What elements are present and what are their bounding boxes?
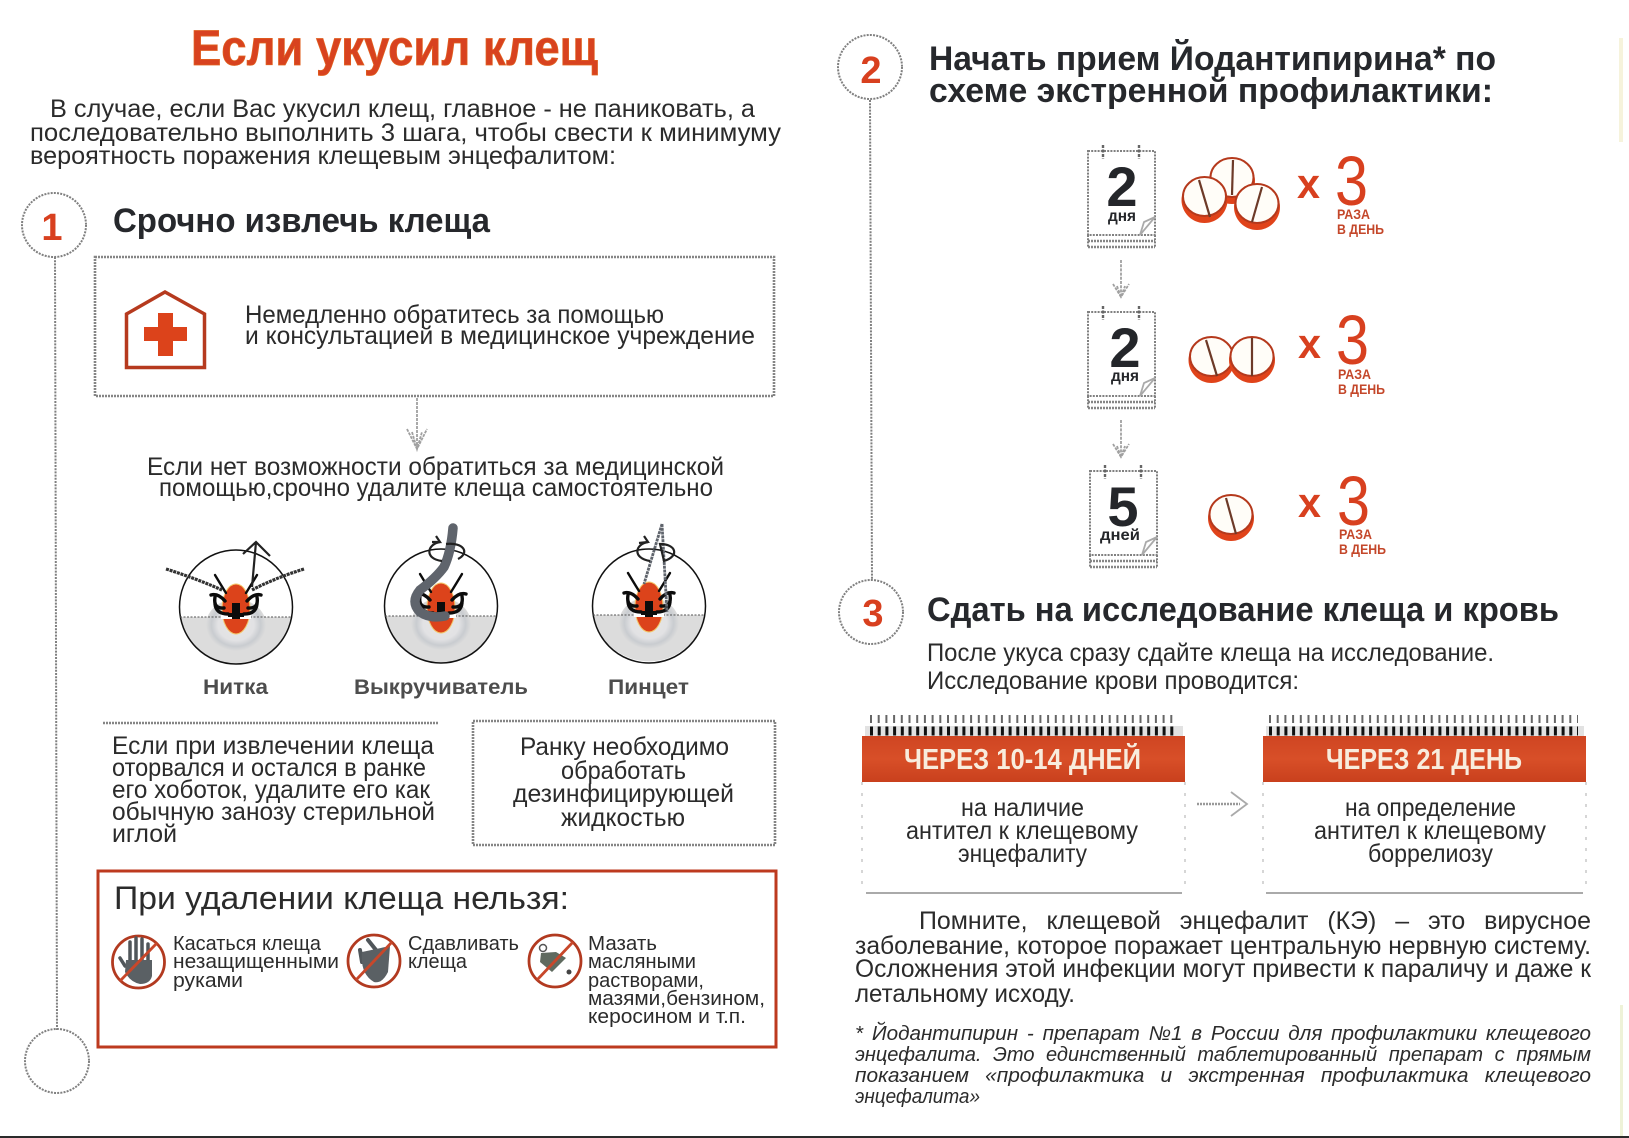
calendar: 2 days: 2 [1106, 155, 1138, 218]
card text: антител к клещевому [1314, 817, 1546, 845]
dosage row: 5 days, 1 tablet [1090, 462, 1386, 567]
frequency: x 3 times a day: РАЗА [1337, 206, 1370, 222]
arrow: down from panel [407, 398, 427, 449]
card text [1314, 794, 1546, 868]
step 2 heading: Начать прием Йодантипирина* по [929, 39, 1496, 78]
frequency: x 3 times a day: х [1297, 160, 1321, 207]
step 1 badge [22, 193, 86, 257]
text: no squeezing: Сдавливать [408, 933, 519, 955]
step 3 text: После укуса сразу сдайте клеща на исследование. [927, 639, 1494, 667]
text: remove tick yourself [147, 453, 724, 502]
red band [862, 736, 1185, 782]
step 2 badge [838, 35, 902, 99]
frequency: x 3 times a day: 3 [1337, 462, 1370, 540]
text: reminder paragraph [855, 907, 1592, 1008]
text: footnote: энцефалита. Это единственный таблетированный препарат с прямым [855, 1044, 1591, 1066]
frequency: x 3 times a day: РАЗА [1339, 526, 1372, 542]
card: after 10-14 days: ЧЕРЕЗ 10-14 ДНЕЙ [904, 742, 1141, 776]
frequency: x 3 times a day: х [1298, 479, 1322, 526]
text: seek help [245, 301, 755, 350]
panel: disinfect wound: обработать [561, 757, 686, 785]
frequency: x 3 times a day [1298, 462, 1386, 557]
step 2 badge: 2 [860, 50, 882, 92]
title: Если укусил клещ [191, 20, 598, 76]
calendar: 5 days [1090, 465, 1157, 567]
panel: disinfect wound [473, 721, 775, 845]
panel: do not when removing [98, 871, 776, 1047]
step 3 badge: 3 [862, 593, 884, 635]
arrow: between cards [1197, 792, 1247, 816]
text: no oil: Мазать [588, 933, 657, 955]
text: no oil: мазями,бензином, [588, 988, 765, 1010]
diagram: tweezers removal [592, 524, 706, 663]
text: reminder paragraph: летальному исходу. [855, 980, 1075, 1008]
frequency: x 3 times a day: РАЗА [1338, 366, 1371, 382]
panel: disinfect wound: Ранку необходимо [520, 733, 729, 761]
text: broken proboscis [103, 723, 439, 848]
text: broken proboscis: иглой [112, 820, 177, 848]
intro text: последовательно выполнить 3 шага, чтобы свести к минимуму [30, 119, 782, 147]
calendar: 5 days: 5 [1107, 475, 1139, 538]
text: remove tick yourself: помощью,срочно удалите клеща самостоятельно [159, 474, 713, 502]
intro text: вероятность поражения клещевым энцефалитом: [30, 142, 616, 170]
text: no oil [588, 933, 765, 1028]
text: no bare hand [173, 933, 339, 992]
card text: антител к клещевому [906, 817, 1138, 845]
step 3 badge [839, 580, 903, 644]
calendar: 2 days: дня [1111, 368, 1139, 385]
label: thread: Нитка [203, 676, 268, 699]
text: seek help: Немедленно обратитесь за помощью [245, 301, 664, 329]
text: no squeezing [408, 933, 519, 973]
icon: 3 tablets [1182, 158, 1280, 230]
text: remove tick yourself: Если нет возможности обратиться за медицинской [147, 453, 724, 481]
text: no squeezing: клеща [408, 951, 468, 973]
step 2 heading [929, 39, 1496, 110]
icon: no oil [529, 935, 581, 987]
panel heading: При удалении клеща нельзя: [114, 880, 569, 916]
card text: на определение [1345, 794, 1516, 822]
calendar: 2 days: дня [1108, 208, 1136, 225]
icon: 2 tablets [1188, 337, 1275, 383]
dosage row: 2 days, 3 tablets [1088, 142, 1384, 247]
label: tweezers: Пинцет [608, 676, 689, 699]
step 3 text [927, 639, 1494, 695]
intro text: В случае, если Вас укусил клещ, главное - не паниковать, а [50, 95, 755, 123]
text: reminder paragraph: Осложнения этой инфекции могут привести к параличу и даже к [855, 955, 1592, 983]
text: broken proboscis: обычную занозу стерильной [112, 798, 435, 826]
card: after 10-14 days [862, 719, 1185, 893]
frequency: x 3 times a day: В ДЕНЬ [1337, 221, 1384, 237]
panel: disinfect wound: дезинфицирующей [513, 780, 734, 808]
card: after 21 days: ЧЕРЕЗ 21 ДЕНЬ [1326, 744, 1522, 776]
text: footnote: * Йодантипирин - препарат №1 в России для профилактики клещевого [855, 1022, 1591, 1045]
label: twister: Выкручиватель [354, 676, 528, 699]
text: no oil: масляными [588, 951, 696, 973]
text: seek help: и консультацией в медицинское учреждение [245, 322, 755, 350]
calendar: 5 days: дней [1100, 527, 1140, 544]
frequency: x 3 times a day: В ДЕНЬ [1338, 381, 1385, 397]
icon: no squeezing [348, 935, 400, 987]
text: reminder paragraph: заболевание, которое поражает центральную нервную систему. [855, 932, 1591, 960]
card text: боррелиозу [1368, 840, 1493, 868]
calendar: 2 days [1088, 306, 1155, 408]
red band [1263, 736, 1586, 782]
timeline: step 1 connector [25, 257, 89, 1093]
timeline: step 2 connector [870, 100, 872, 580]
arrow: to third dosage [1113, 420, 1129, 457]
panel: disinfect wound: жидкостью [561, 804, 685, 832]
step 1 heading: Срочно извлечь клеща [113, 202, 491, 240]
frequency: x 3 times a day [1297, 142, 1384, 237]
step 2 heading: схеме экстренной профилактики: [929, 72, 1493, 110]
text: no oil: керосином и т.п. [588, 1006, 746, 1028]
diagram: thread removal [166, 542, 304, 664]
step 1 badge: 1 [41, 207, 63, 249]
text: broken proboscis: оторвался и остался в ранке [112, 754, 426, 782]
text: no bare hand: незащищенными [173, 951, 339, 973]
icon: 1 tablet [1208, 495, 1254, 541]
text: reminder paragraph: Помните, клещевой энцефалит (КЭ) – это вирусное [919, 907, 1591, 935]
frequency: x 3 times a day: 3 [1336, 301, 1369, 379]
icon: hospital house [126, 292, 204, 368]
text: no bare hand: Касаться клеща [173, 933, 322, 955]
text: no oil: растворами, [588, 970, 704, 992]
diagram: twister removal [384, 528, 498, 663]
card text [906, 794, 1138, 868]
frequency: x 3 times a day: х [1298, 320, 1322, 367]
step 3 heading: Сдать на исследование клеща и кровь [927, 591, 1559, 629]
spiral binding [1266, 719, 1584, 736]
intro text [30, 95, 782, 170]
text: footnote [855, 1022, 1591, 1108]
spiral binding [865, 719, 1183, 736]
card text: на наличие [961, 794, 1084, 822]
step 3 text: Исследование крови проводится: [927, 667, 1299, 695]
frequency: x 3 times a day: В ДЕНЬ [1339, 541, 1386, 557]
dosage row: 2 days, 2 tablets [1088, 301, 1385, 408]
frequency: x 3 times a day: 3 [1335, 142, 1368, 220]
panel: seek medical help [95, 257, 774, 396]
card text: энцефалиту [958, 840, 1087, 868]
icon: no bare hand [112, 936, 164, 988]
text: broken proboscis: его хоботок, удалите его как [112, 776, 431, 804]
calendar: 2 days: 2 [1109, 316, 1141, 379]
text: footnote: энцефалита» [855, 1086, 980, 1108]
card: after 21 days [1263, 719, 1586, 893]
calendar: 2 days [1088, 145, 1155, 247]
arrow: to second dosage [1113, 260, 1129, 297]
text: broken proboscis: Если при извлечении клеща [112, 732, 434, 760]
text: footnote: показанием «профилактика и экстренная профилактика клещевого [855, 1065, 1591, 1087]
frequency: x 3 times a day [1298, 301, 1385, 397]
text: no bare hand: руками [173, 970, 243, 992]
